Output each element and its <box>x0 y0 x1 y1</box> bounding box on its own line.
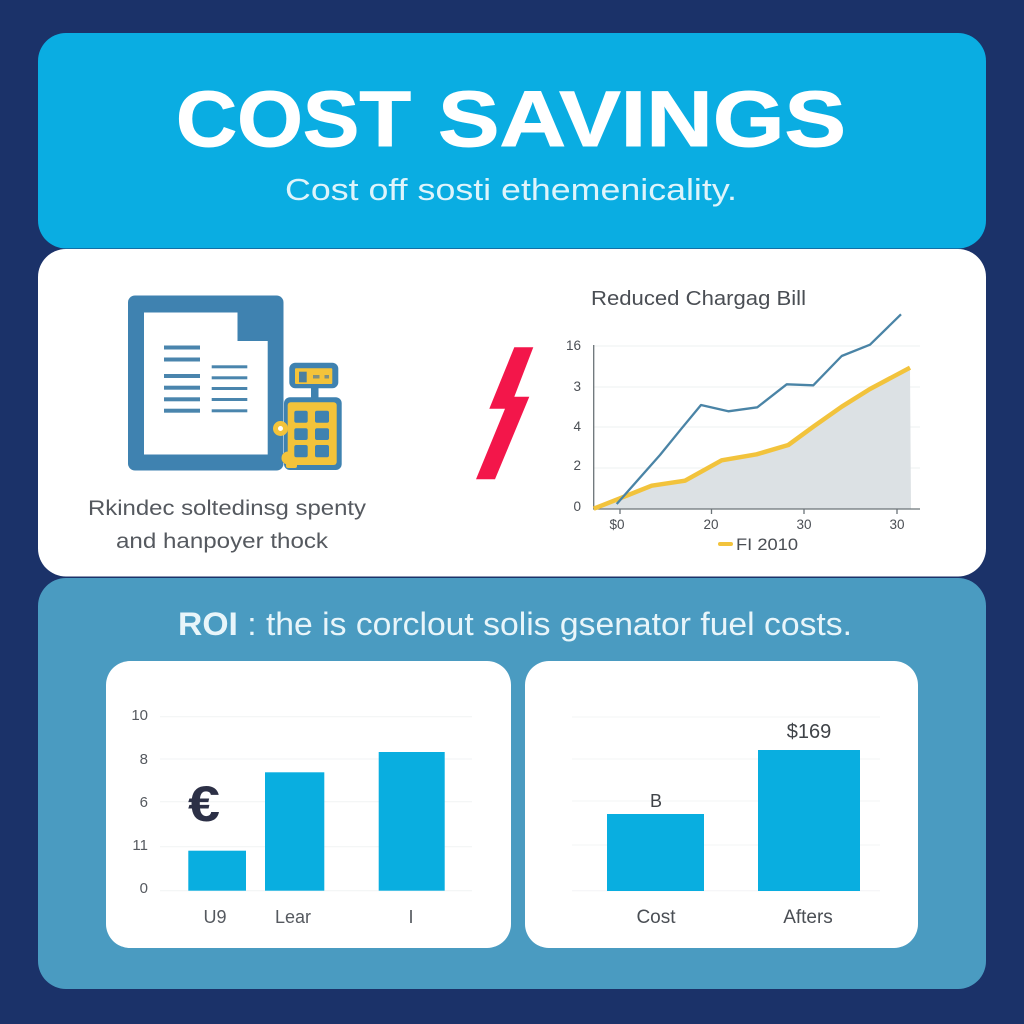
y axis labels: 16 <box>566 338 581 353</box>
icon: red lightning bolt <box>476 347 533 479</box>
title <box>176 74 846 163</box>
icon: document and calculator <box>128 296 342 470</box>
value labels <box>650 721 831 811</box>
x axis labels: 30 <box>889 517 905 532</box>
y axis labels: 3 <box>573 379 581 394</box>
ROI heading: ROI : the is corclout solis gsenator fuel costs. <box>178 606 852 642</box>
y axis labels: 2 <box>573 458 581 473</box>
legend: FI 2010 <box>736 535 798 554</box>
y axis labels: 0 <box>573 499 581 514</box>
x axis labels <box>609 517 905 532</box>
x axis labels <box>203 907 414 927</box>
x axis labels: 30 <box>796 517 812 532</box>
x axis labels: I <box>408 907 414 927</box>
y axis labels: 4 <box>573 419 581 434</box>
panel: right bar chart card <box>525 661 918 948</box>
icon: euro sign: € <box>188 776 220 832</box>
axes <box>594 345 920 514</box>
y axis labels <box>566 338 581 514</box>
y axis labels: 6 <box>140 794 148 811</box>
yellow series <box>594 368 910 509</box>
y axis labels <box>131 707 148 897</box>
panel: lower ROI section <box>38 578 986 989</box>
title: COST <box>176 74 411 163</box>
value labels: B <box>650 791 662 811</box>
subtitle: Cost off sosti ethemenicality. <box>285 172 737 207</box>
panel: left bar chart card <box>106 661 511 948</box>
bars <box>188 752 445 891</box>
text block: left caption: Rkindec soltedinsg spenty <box>88 497 367 520</box>
x axis labels: Cost <box>636 907 676 928</box>
blue series <box>617 314 901 504</box>
bars <box>607 750 860 891</box>
area under yellow series <box>594 368 911 509</box>
title: SAVINGS <box>438 74 846 163</box>
y axis labels: 0 <box>140 880 148 897</box>
panel: header <box>38 33 986 248</box>
chart heading: Reduced Chargag Bill <box>591 288 806 310</box>
value labels: $169 <box>787 721 831 743</box>
y axis labels: 10 <box>131 707 148 724</box>
x axis labels: U9 <box>203 907 227 927</box>
x axis labels <box>636 907 833 928</box>
x axis labels: Lear <box>275 907 311 927</box>
x axis labels: Afters <box>783 907 833 928</box>
x axis labels: 20 <box>703 517 719 532</box>
panel: white middle section <box>38 249 986 576</box>
x axis labels: $0 <box>609 517 625 532</box>
text block: left caption: and hanpoyer thock <box>116 530 329 553</box>
line chart <box>566 314 920 554</box>
text block: left caption <box>88 497 367 553</box>
y axis labels: 8 <box>140 751 148 768</box>
y axis labels: 11 <box>132 837 148 854</box>
